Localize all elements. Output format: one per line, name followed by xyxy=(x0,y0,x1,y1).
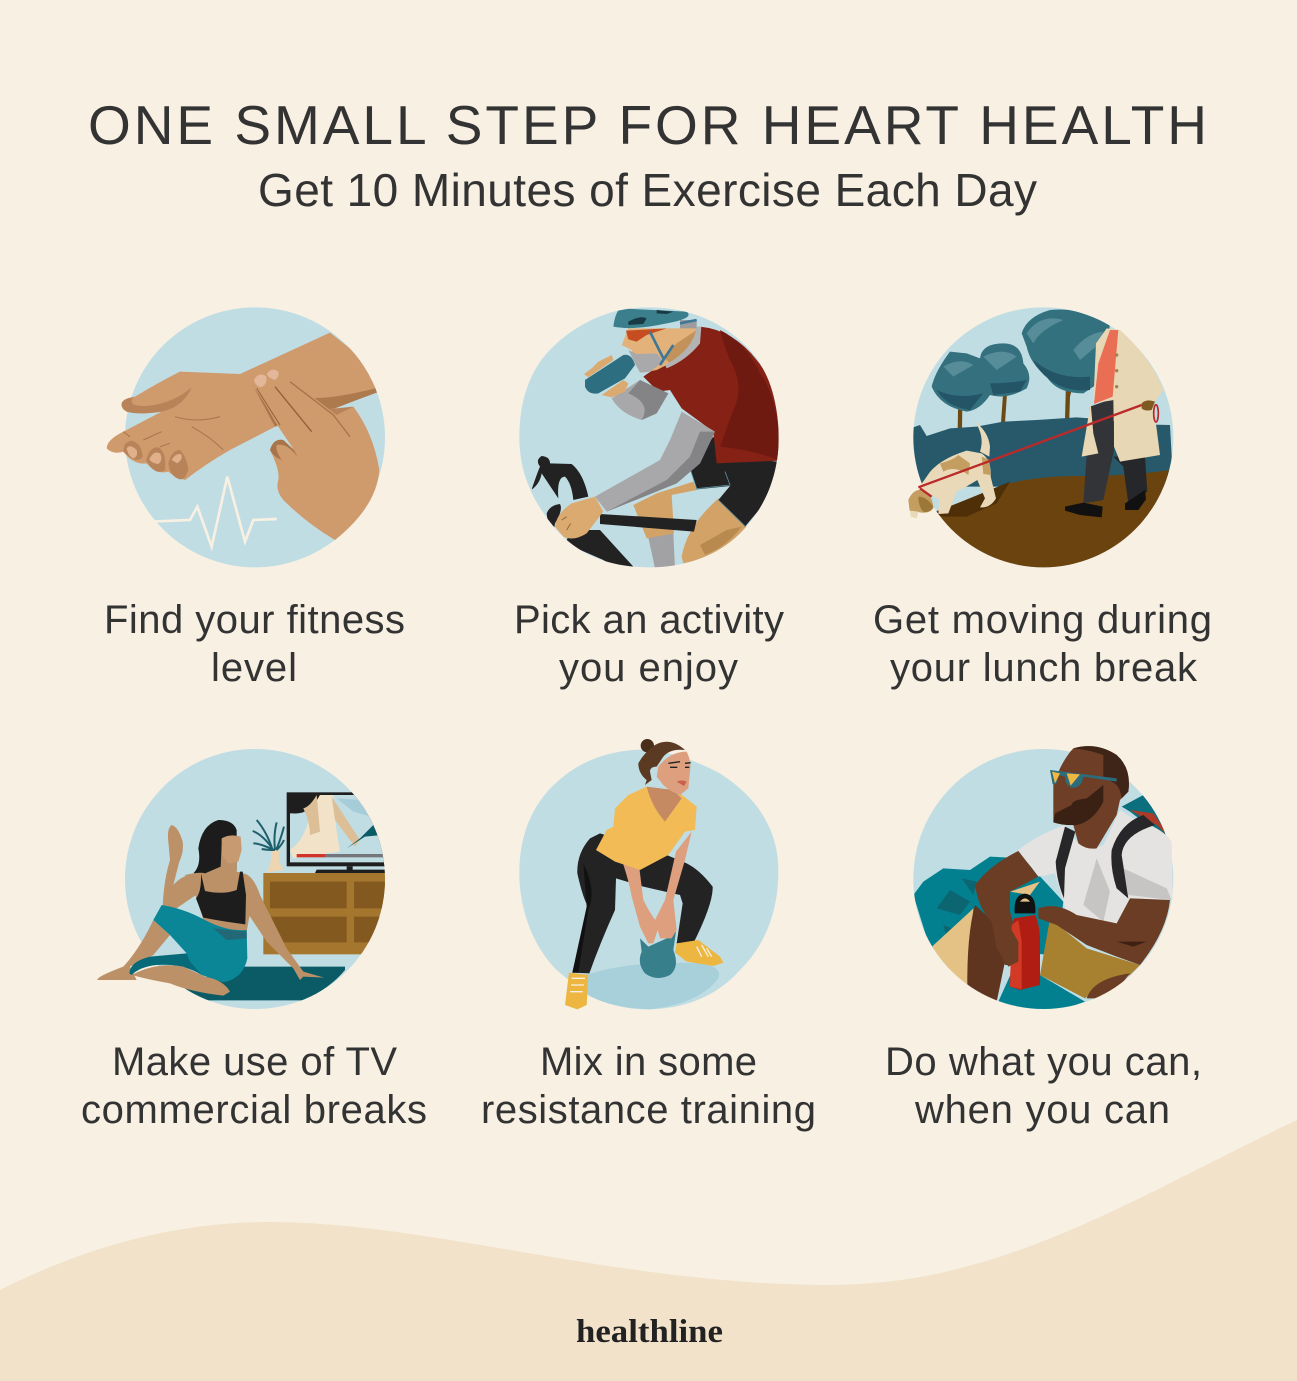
head and hair xyxy=(657,752,690,795)
icon: person walking a dog in a park xyxy=(908,307,1177,570)
face xyxy=(222,835,242,863)
television xyxy=(287,792,390,873)
sunglasses xyxy=(1050,770,1117,788)
hedge xyxy=(910,417,1173,487)
label: find your fitness level: Find your fitness xyxy=(104,598,405,642)
icon: woman stretching in front of a TV xyxy=(97,749,390,1009)
hair xyxy=(193,820,237,875)
raised arm xyxy=(163,825,196,912)
title: ONE SMALL STEP FOR HEART HEALTH xyxy=(88,94,1207,156)
seat xyxy=(998,975,1085,1009)
wrist shadow under fingers xyxy=(253,385,280,427)
icon: hiker with water bottle xyxy=(910,746,1173,1012)
label: get moving during your lunch break: your lunch break xyxy=(890,646,1198,690)
right shoe xyxy=(675,940,723,966)
icon: woman lifting a kettlebell xyxy=(519,739,778,1009)
hand and bottle xyxy=(602,380,628,397)
water bottle xyxy=(1015,894,1035,913)
label: do what you can when you can: when you can xyxy=(914,1088,1170,1132)
ground xyxy=(936,470,1170,568)
label: find your fitness level xyxy=(104,598,405,690)
label: get moving during your lunch break xyxy=(873,598,1212,690)
arms and legs xyxy=(967,905,1005,1002)
trees xyxy=(910,309,1173,487)
white t-shirt xyxy=(1018,810,1173,952)
heartbeat line xyxy=(150,477,277,547)
label: mix in some resistance training xyxy=(481,1040,816,1132)
t-shirt xyxy=(596,787,697,870)
torso and neck xyxy=(185,845,255,932)
leggings xyxy=(129,953,202,975)
woman xyxy=(97,820,324,996)
icon: fingers checking pulse on wrist xyxy=(107,307,390,567)
label: pick an activity you enjoy: Pick an activity xyxy=(514,598,784,642)
neck xyxy=(647,787,682,822)
man coat xyxy=(1093,328,1163,462)
label: pick an activity you enjoy xyxy=(514,598,784,690)
head xyxy=(1053,746,1129,849)
left shoe xyxy=(565,973,588,1009)
arms xyxy=(616,843,659,943)
leash xyxy=(918,405,1142,497)
subtitle: Get 10 Minutes of Exercise Each Day xyxy=(258,164,1037,216)
label: make use of tv commercial breaks: Make use of TV xyxy=(112,1040,397,1084)
bottom wave band xyxy=(0,1120,1297,1381)
bike frame xyxy=(600,514,697,532)
shorts xyxy=(1040,918,1140,998)
label: pick an activity you enjoy: you enjoy xyxy=(559,646,738,690)
leggings xyxy=(572,833,713,973)
label: do what you can when you can: Do what you can, xyxy=(885,1040,1202,1084)
lower shin and foot xyxy=(132,965,230,996)
label: do what you can when you can xyxy=(885,1040,1202,1132)
logo: healthline: healthline xyxy=(576,1314,723,1350)
floor shadow xyxy=(585,963,719,1009)
label: mix in some resistance training: resistance training xyxy=(481,1088,816,1132)
label: find your fitness level: level xyxy=(211,646,297,690)
label: mix in some resistance training: Mix in some xyxy=(540,1040,757,1084)
backpack straps xyxy=(1056,815,1155,898)
label: get moving during your lunch break: Get moving during xyxy=(873,598,1212,642)
label: make use of tv commercial breaks xyxy=(81,1040,427,1132)
dog xyxy=(908,422,996,518)
plant and vase xyxy=(253,820,284,872)
kettlebell xyxy=(640,932,676,978)
cyclist head and helmet xyxy=(680,320,697,328)
shin xyxy=(97,920,170,980)
cabinet xyxy=(263,873,390,954)
yoga mat xyxy=(173,967,345,1000)
supporting arm xyxy=(243,873,324,980)
hand on bottle xyxy=(992,918,1018,967)
hillside trees xyxy=(913,857,1063,955)
man trousers and shoes xyxy=(1083,398,1114,503)
icon: cyclist drinking from a bottle xyxy=(519,307,780,568)
label: make use of tv commercial breaks: commercial breaks xyxy=(81,1088,427,1132)
tank top xyxy=(196,872,246,924)
